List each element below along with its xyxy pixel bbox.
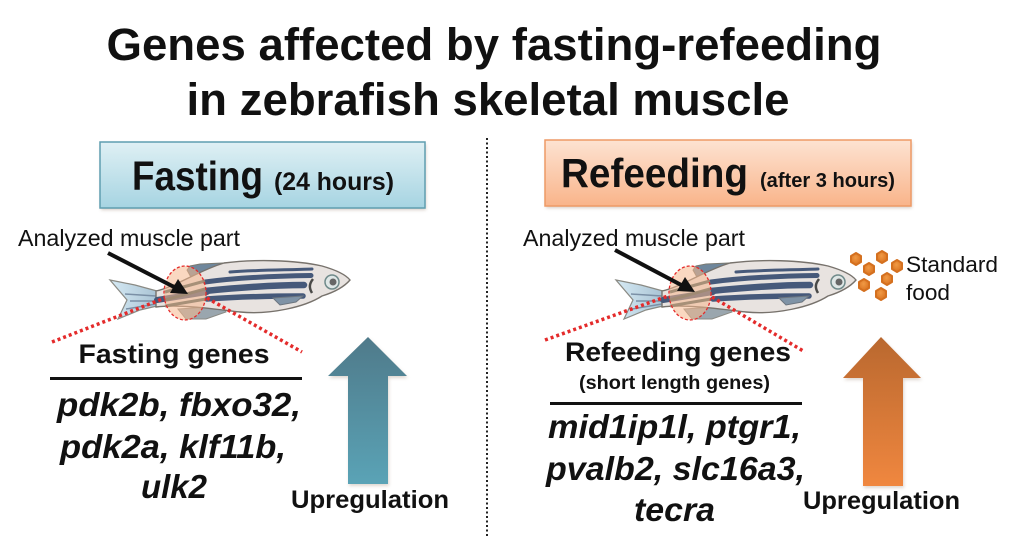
black arrow [615, 250, 695, 292]
arrow: upregulation [843, 337, 922, 488]
fasting gene list: ulk2 [141, 469, 207, 506]
red dotted zoom lines [52, 298, 302, 352]
standard food label [906, 252, 998, 305]
panel: refeeding [523, 140, 998, 529]
upregulation label: Upregulation [803, 487, 960, 515]
fasting gene list: pdk2b, fbxo32, [56, 387, 301, 424]
fasting genes heading: Fasting genes [78, 339, 270, 369]
red dotted zoom lines [545, 296, 805, 352]
title [106, 19, 882, 125]
heading rule [50, 377, 302, 380]
zebrafish illustration [616, 261, 856, 319]
black arrow [108, 253, 188, 294]
fasting header box: (24 hours) [274, 168, 394, 196]
refeeding gene list: mid1ip1l, ptgr1, [548, 409, 801, 446]
refeeding gene list [545, 409, 805, 529]
center divider [486, 138, 488, 537]
fasting gene list [56, 387, 301, 506]
muscle highlight circle [669, 266, 711, 320]
upregulation label: Upregulation [291, 486, 449, 514]
analyzed muscle part label: Analyzed muscle part [523, 225, 745, 251]
fasting header box [100, 142, 426, 210]
fasting gene list: pdk2a, klf11b, [59, 429, 286, 466]
refeeding gene list: tecra [634, 492, 715, 529]
refeeding header box: Refeeding [561, 150, 748, 196]
title: Genes affected by fasting-refeeding [106, 19, 882, 70]
muscle highlight circle [164, 266, 206, 320]
analyzed muscle part label: Analyzed muscle part [18, 225, 240, 251]
short length genes note: (short length genes) [579, 373, 770, 394]
refeeding header box [545, 140, 912, 208]
arrow: upregulation [328, 337, 408, 486]
panel: fasting [18, 142, 449, 514]
standard food label: Standard [906, 252, 998, 277]
standard food label: food [906, 280, 950, 305]
refeeding gene list: pvalb2, slc16a3, [545, 451, 805, 488]
refeeding genes heading: Refeeding genes [565, 337, 791, 367]
fasting header box: Fasting [132, 153, 263, 199]
heading rule [550, 402, 802, 405]
refeeding header box: (after 3 hours) [760, 170, 895, 192]
zebrafish illustration [110, 261, 350, 319]
icon: food pellets [851, 251, 902, 300]
title: in zebrafish skeletal muscle [186, 74, 789, 125]
